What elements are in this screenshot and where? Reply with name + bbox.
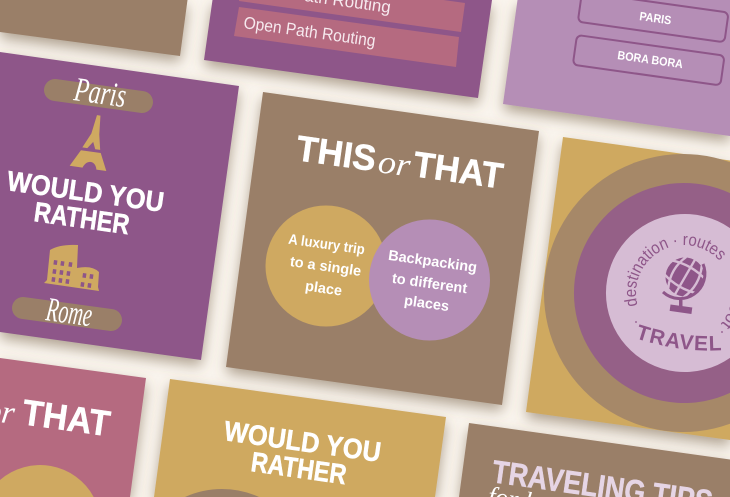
panel: routing options card — [204, 0, 492, 98]
panel: would you rather Paris or Rome — [0, 52, 239, 360]
heading: this or that: THIS — [294, 127, 379, 179]
label: travel: TRAVEL — [638, 324, 721, 351]
icon: globe — [658, 250, 712, 314]
gold circle — [0, 465, 94, 497]
option: Bora Bora: BORA BORA — [617, 48, 684, 71]
label: Rome: Rome — [43, 291, 95, 334]
panel: traveling tips card — [459, 423, 730, 497]
label: Paris — [55, 71, 142, 115]
icon: Eiffel tower — [70, 112, 114, 171]
panel: would you rather gold card — [154, 379, 446, 497]
heading fragment: THAT — [20, 391, 113, 444]
heading: this or that: or — [376, 144, 413, 184]
option: luxury trip — [266, 206, 386, 326]
option button: open path routing — [234, 7, 459, 67]
panel: travel badge card — [518, 134, 730, 454]
option: luxury trip: place — [304, 279, 343, 300]
panel: this or that pink card — [0, 358, 146, 497]
label: Rome — [23, 291, 111, 334]
option: backpacking: Backpacking — [387, 248, 478, 276]
option: Paris: PARIS — [639, 9, 672, 27]
option: Paris — [578, 0, 729, 42]
option button: path routing — [239, 0, 465, 32]
brown circle — [185, 489, 259, 497]
option button: open path routing: Open Path Routing — [242, 13, 377, 50]
heading: would you rather: WOULD YOU — [222, 415, 383, 468]
heading: would you rather — [222, 415, 383, 490]
label: Paris: Paris — [71, 71, 129, 115]
panel: top-left brown card — [0, 0, 188, 56]
heading: this or that: THAT — [411, 143, 506, 196]
option: Bora Bora — [573, 35, 725, 85]
heading: this or that — [294, 127, 506, 196]
option: backpacking: to different — [391, 271, 468, 297]
icon: Colosseum — [44, 245, 99, 291]
panel: destinations card — [503, 0, 730, 136]
option: luxury trip: to a single — [289, 254, 362, 280]
option: luxury trip: A luxury trip — [287, 232, 366, 258]
panel: this or that — [226, 92, 539, 405]
heading: would you rather: RATHER — [249, 446, 349, 490]
rings — [544, 154, 730, 432]
heading: would you rather: WOULD YOU — [5, 165, 166, 218]
heading: would you rather — [5, 165, 166, 240]
circular text: destination · routes — [624, 236, 725, 306]
option: backpacking: places — [403, 293, 450, 315]
option: backpacking — [369, 220, 490, 340]
heading: would you rather: RATHER — [32, 196, 132, 240]
